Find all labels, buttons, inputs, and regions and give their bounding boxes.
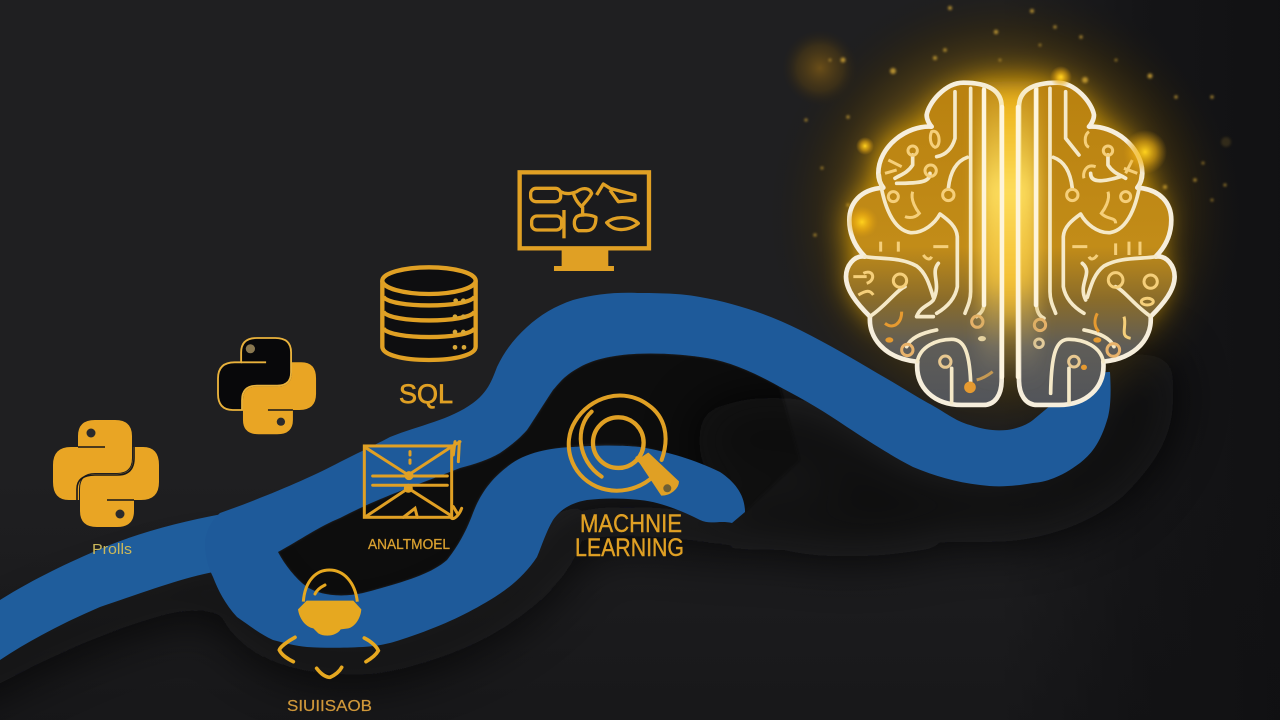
label: machine learning: LEARNING — [575, 534, 684, 562]
icon: python, black and gold — [218, 338, 316, 434]
soft shadow under the ribbon — [0, 385, 1140, 685]
brain left hemisphere — [846, 83, 1002, 405]
right circuit traces — [1037, 88, 1156, 403]
icon: python, large gold — [53, 420, 159, 527]
label: python: Prolls — [92, 541, 132, 558]
brain glow — [850, 81, 1164, 320]
hot spots of glow — [846, 66, 1167, 238]
central light beam — [980, 85, 1038, 385]
brain halo — [770, 0, 1240, 450]
label: stubs: SIUIISAOB — [287, 698, 372, 715]
dark side on the right — [1000, 0, 1280, 720]
blue ribbon: main loop — [205, 293, 1111, 648]
brain right hemisphere — [1019, 83, 1175, 405]
label: SQL: SQL — [399, 379, 453, 409]
icon: monitor with flowchart — [520, 172, 649, 271]
brain centre highlights — [984, 90, 1036, 377]
left circuit nodes — [853, 131, 993, 392]
dark gap between the ribbons — [278, 353, 800, 595]
gold particles — [804, 6, 1231, 236]
icon: database — [382, 267, 476, 360]
label: machine learning: MACHNIE — [580, 510, 682, 538]
icon: helmet with brackets — [279, 570, 378, 677]
brain — [846, 83, 1175, 405]
dark lower edge of the page — [0, 480, 1280, 720]
icon: magnifier in a circle — [569, 396, 678, 495]
left circuit traces — [865, 88, 984, 403]
right circuit nodes — [1034, 132, 1157, 370]
blue ribbon: left section — [0, 514, 225, 660]
label: machine learning — [575, 510, 684, 562]
icon: analysis chart — [364, 442, 462, 519]
label: analysis: ANALTMOEL — [368, 536, 450, 553]
